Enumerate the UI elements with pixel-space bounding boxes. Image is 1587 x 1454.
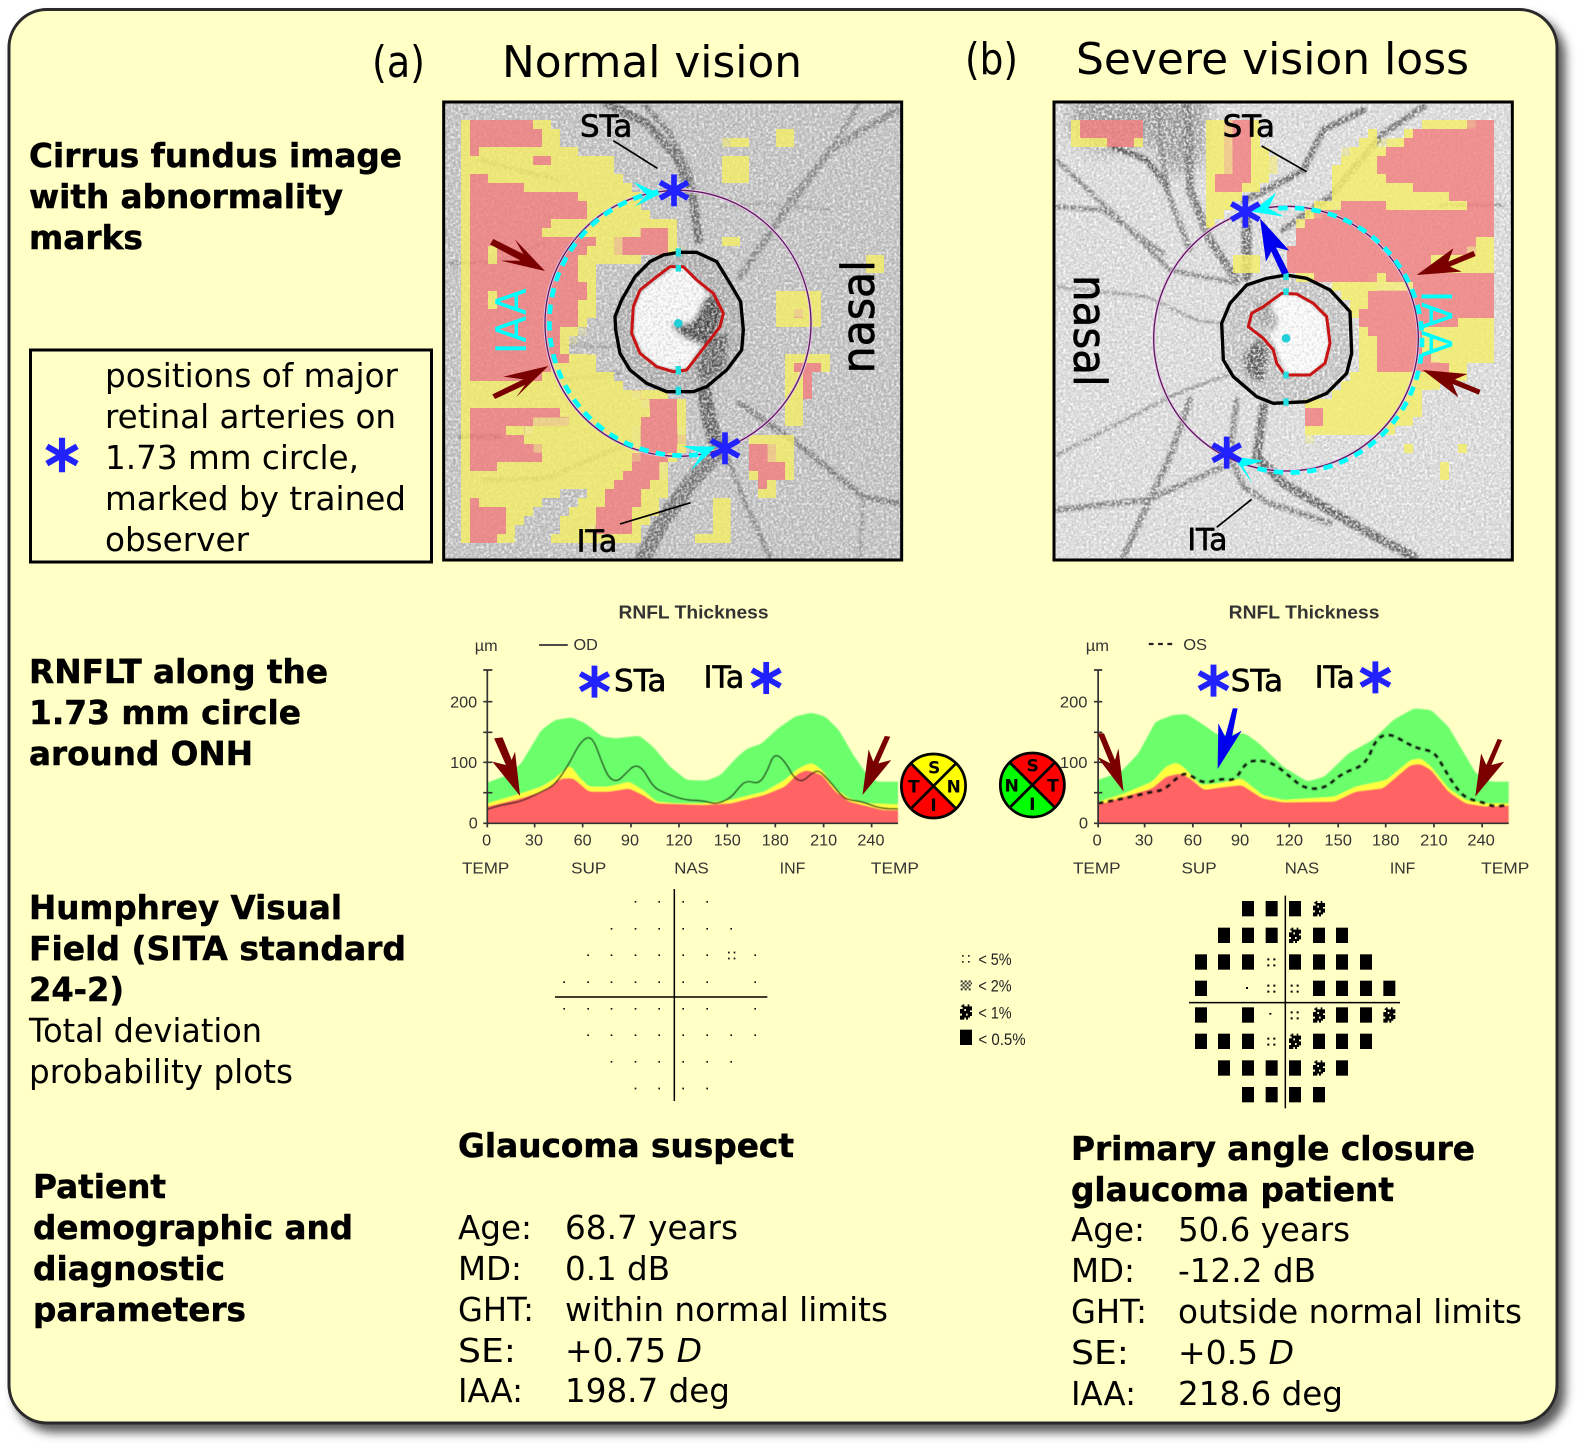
axes: 30: [1135, 832, 1153, 849]
text block: primary angle closure glaucoma patient: +0.5 D: [1178, 1333, 1294, 1372]
normative bands and thickness curve: [1097, 708, 1510, 824]
abnormality overlay yellow and red: [461, 119, 883, 543]
text block: primary angle closure glaucoma patient: Age:: [1071, 1210, 1145, 1249]
legend box: positions of major retinal arteries: positions of major: [105, 356, 398, 395]
axes: SUP: [571, 859, 606, 877]
labels: STa ITa IAA nasal: [487, 110, 885, 560]
arrows: dark red IAA limits: [490, 239, 548, 399]
abnormality overlay yellow and red: [1071, 118, 1495, 478]
probability legend: < 2%: [978, 977, 1012, 996]
text block: primary angle closure glaucoma patient: outside normal limits: [1178, 1292, 1522, 1331]
row label: Humphrey Visual Field: probability plots: [29, 1052, 293, 1091]
arrow: blue: [1218, 708, 1242, 769]
axes: 210: [810, 831, 837, 849]
text block: primary angle closure glaucoma patient: SE:: [1071, 1333, 1129, 1372]
chart title and legend: OS: [1183, 636, 1207, 654]
axes: [1060, 670, 1529, 877]
probability legend: < 5%: [978, 950, 1012, 969]
row label: Cirrus fundus image: with abnormality: [29, 177, 343, 216]
chart: RNFL thickness normal vision: [450, 601, 966, 877]
artery markers: [1199, 660, 1390, 699]
row label: Humphrey Visual Field: [28, 888, 406, 1091]
chart title and legend: µm: [1086, 637, 1109, 655]
row label: patient parameters: demographic and: [33, 1208, 353, 1247]
text block: glaucoma suspect: 0.1 dB: [565, 1249, 670, 1288]
artery markers: STa: [614, 663, 666, 699]
heading: (a) Normal vision: (a): [372, 37, 425, 88]
text block: glaucoma suspect: IAA:: [458, 1371, 523, 1410]
legend box: positions of major retinal arteries: observer: [105, 520, 249, 559]
axes: 120: [665, 831, 693, 849]
axes: 100: [1060, 754, 1087, 772]
text block: glaucoma suspect: SE:: [458, 1331, 516, 1370]
optic disc contours: [615, 248, 743, 395]
sector indicator NSTI: [1000, 753, 1064, 817]
text block: glaucoma suspect: 198.7 deg: [565, 1371, 730, 1410]
labels: STa ITa IAA nasal: [1063, 110, 1461, 558]
artery markers: ITa: [1315, 660, 1355, 695]
text block: primary angle closure glaucoma patient: IAA:: [1071, 1374, 1136, 1413]
stars: STa and ITa positions: [1213, 196, 1259, 469]
text block: primary angle closure glaucoma patient: -12.2 dB: [1178, 1251, 1316, 1290]
sector indicator TSNI: T: [908, 776, 920, 796]
arrow: blue STa shift: [1260, 218, 1289, 275]
sector indicator TSNI: N: [947, 776, 961, 796]
row label: RNFLT: around ONH: [29, 734, 253, 773]
heading: (b) Severe vision loss: Severe vision loss: [1076, 34, 1469, 85]
axes: 0: [482, 831, 491, 849]
labels: STa ITa IAA nasal: IAA: [1412, 291, 1461, 358]
axes: 0: [469, 815, 478, 833]
legend box: positions of major retinal arteries: 1.73 mm circle,: [105, 438, 359, 477]
axes: TEMP: [1481, 860, 1529, 877]
labels: STa ITa IAA nasal: IAA: [487, 288, 536, 354]
panel: fundus image normal vision: [444, 102, 902, 560]
1.73 mm circle with cyan IAA arc: [545, 190, 811, 456]
axes: 60: [1184, 832, 1202, 849]
axes: [450, 670, 919, 877]
text block: glaucoma suspect: Glaucoma suspect: [458, 1126, 794, 1165]
text block: glaucoma suspect: MD:: [458, 1249, 522, 1288]
axes: 30: [525, 831, 543, 849]
chart title and legend: µm: [475, 637, 498, 655]
normative bands and thickness curve: [488, 712, 899, 824]
axes: SUP: [1181, 860, 1217, 877]
axes: 200: [1060, 694, 1087, 711]
probability legend: < 1%: [978, 1003, 1012, 1022]
legend box: positions of major retinal arteries: retinal arteries on: [105, 397, 396, 436]
row label: Humphrey Visual Field: Humphrey Visual: [29, 888, 342, 927]
heading: (b) Severe vision loss: (b): [965, 34, 1018, 85]
probability legend: < 0.5%: [978, 1030, 1026, 1049]
sector indicator NSTI: T: [1047, 776, 1059, 795]
axes: 180: [1372, 832, 1399, 849]
row label: Cirrus fundus image: [29, 136, 402, 257]
axes: 210: [1420, 832, 1448, 849]
text block: glaucoma suspect: Age:: [458, 1208, 532, 1247]
row label: Cirrus fundus image: marks: [29, 218, 143, 257]
axes: INF: [780, 859, 806, 877]
axes: 120: [1275, 832, 1303, 849]
heading: (a) Normal vision: Normal vision: [502, 37, 802, 88]
sector indicator NSTI: I: [1029, 794, 1036, 814]
row label: patient parameters: Patient: [33, 1167, 166, 1206]
axes: TEMP: [871, 859, 919, 877]
row label: patient parameters: parameters: [33, 1290, 246, 1329]
axes: NAS: [1285, 860, 1319, 877]
text block: primary angle closure glaucoma patient: [1071, 1129, 1522, 1413]
text block: primary angle closure glaucoma patient: glaucoma patient: [1071, 1170, 1394, 1209]
chart: RNFL thickness severe vision loss: [1000, 603, 1529, 877]
probability legend: [960, 950, 1026, 1049]
axes: INF: [1390, 860, 1415, 877]
sector indicator TSNI: [901, 754, 966, 818]
sector indicator NSTI: S: [1026, 756, 1039, 776]
arrows: dark red: [492, 736, 891, 796]
labels: STa ITa IAA nasal: nasal: [1063, 275, 1116, 387]
sector indicator NSTI: N: [1004, 776, 1019, 795]
legend box: positions of major retinal arteries: [30, 350, 432, 562]
axes: 180: [762, 831, 789, 849]
stars: STa and ITa positions: [660, 174, 739, 464]
labels: STa ITa IAA nasal: STa: [580, 110, 632, 145]
text block: glaucoma suspect: GHT:: [458, 1290, 534, 1329]
sector indicator TSNI: I: [930, 795, 937, 815]
text block: glaucoma suspect: +0.75 D: [565, 1331, 702, 1370]
axes: 150: [714, 831, 741, 849]
heading: (a) Normal vision: [372, 37, 802, 88]
row label: RNFLT: RNFLT along the: [29, 652, 328, 691]
row label: Humphrey Visual Field: Total deviation: [28, 1011, 262, 1050]
arrows: dark red IAA limits: [1417, 248, 1481, 397]
arrows: cyan arrowheads: [633, 182, 716, 471]
axes: 100: [450, 754, 477, 772]
row label: RNFLT: 1.73 mm circle: [29, 693, 301, 732]
text block: glaucoma suspect: [458, 1126, 888, 1410]
arrows: cyan arrowheads: [1233, 193, 1284, 484]
row label: patient parameters: diagnostic: [33, 1249, 225, 1288]
artery markers: ITa: [704, 660, 744, 695]
row label: patient parameters: [33, 1167, 353, 1329]
chart title and legend: [475, 601, 769, 655]
axes: NAS: [674, 859, 709, 877]
panel: fundus image severe vision loss: [1053, 97, 1512, 560]
axes: TEMP: [1073, 860, 1121, 877]
optic disc contours: [1222, 273, 1352, 406]
arrows: dark red: [1097, 733, 1504, 797]
axes: 90: [621, 831, 639, 849]
artery markers: STa: [1231, 663, 1283, 699]
chart title and legend: RNFL Thickness: [618, 601, 769, 622]
text block: primary angle closure glaucoma patient: 218.6 deg: [1178, 1374, 1343, 1413]
axes: TEMP: [462, 859, 509, 877]
row label: RNFLT: [29, 652, 328, 773]
visual field plot severe vision loss: [1189, 896, 1400, 1108]
chart title and legend: RNFL Thickness: [1229, 603, 1380, 623]
axes: 200: [450, 693, 477, 711]
text block: primary angle closure glaucoma patient: GHT:: [1071, 1292, 1147, 1331]
sector indicator TSNI: S: [928, 757, 940, 777]
text block: primary angle closure glaucoma patient: MD:: [1071, 1251, 1135, 1290]
row label: Cirrus fundus image: Cirrus fundus image: [29, 136, 402, 175]
chart title and legend: [1086, 603, 1380, 655]
legend box: positions of major retinal arteries: marked by trained: [105, 479, 406, 518]
text block: glaucoma suspect: within normal limits: [565, 1290, 888, 1329]
axes: 240: [1467, 832, 1495, 849]
axes: 150: [1324, 832, 1352, 849]
text block: glaucoma suspect: 68.7 years: [565, 1208, 738, 1247]
axes: 0: [1092, 832, 1102, 849]
labels: STa ITa IAA nasal: ITa: [1187, 523, 1227, 558]
labels: STa ITa IAA nasal: STa: [1223, 110, 1275, 145]
axes: 90: [1231, 832, 1249, 849]
chart title and legend: OD: [574, 636, 598, 654]
labels: STa ITa IAA nasal: nasal: [832, 260, 885, 373]
axes: 240: [857, 831, 885, 849]
axes: 0: [1079, 815, 1088, 833]
row label: Humphrey Visual Field: Field (SITA standard: [29, 929, 406, 968]
row label: Humphrey Visual Field: 24-2): [29, 970, 124, 1009]
axes: 60: [574, 831, 592, 849]
labels: STa ITa IAA nasal: ITa: [577, 525, 617, 560]
text block: primary angle closure glaucoma patient: 50.6 years: [1178, 1210, 1350, 1249]
text block: primary angle closure glaucoma patient: Primary angle closure: [1071, 1129, 1475, 1168]
artery markers: [580, 660, 780, 699]
1.73 mm circle with cyan IAA arc: [1154, 206, 1422, 473]
visual field plot normal vision: [555, 889, 1026, 1101]
